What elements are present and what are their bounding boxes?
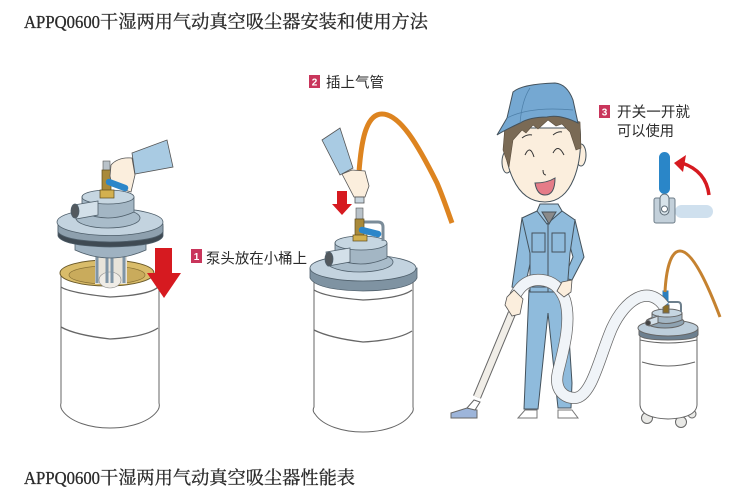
label 3 bbox=[599, 104, 691, 140]
right arm bbox=[564, 220, 584, 280]
label 3: 开关一开就 bbox=[617, 104, 691, 121]
shoes bbox=[518, 410, 578, 418]
lid 2 bbox=[310, 236, 417, 291]
eyes, brows, nose bbox=[522, 132, 564, 175]
mouth bbox=[535, 178, 555, 195]
hand and sleeve 2 bbox=[322, 128, 369, 203]
drum 3 on wheels bbox=[638, 291, 698, 428]
label 3: 可以使用 bbox=[617, 123, 674, 140]
legs bbox=[524, 290, 572, 409]
label 2: 2 bbox=[312, 78, 318, 88]
label 3: 3 bbox=[602, 108, 608, 118]
hair bbox=[503, 112, 581, 167]
pump head lid bbox=[57, 190, 163, 258]
cap bbox=[497, 83, 578, 135]
hand and sleeve bbox=[109, 140, 173, 192]
face bbox=[505, 128, 580, 202]
panel: step 3 switch on and use bbox=[451, 83, 720, 428]
title: installation and usage: APPQ0600 bbox=[24, 12, 100, 32]
panel: step 2 connect air hose bbox=[309, 74, 452, 432]
section title: performance table: APPQ0600 bbox=[24, 468, 100, 488]
red curved arrow bbox=[674, 155, 709, 195]
label 2: 插上气管 bbox=[326, 74, 384, 92]
switch diagram bbox=[654, 152, 713, 223]
white flexible hose bbox=[515, 280, 664, 398]
orange air hose bbox=[359, 114, 452, 223]
title: installation and usage: 干湿两用气动真空吸尘器安装和使用方法 bbox=[100, 12, 429, 32]
valve and lever 2 bbox=[353, 208, 383, 241]
ears bbox=[502, 151, 512, 173]
vacuum wand and nozzle bbox=[451, 313, 512, 418]
worker bbox=[497, 83, 586, 418]
section title: performance table: 干湿两用气动真空吸尘器性能表 bbox=[100, 468, 355, 488]
label 1: 泵头放在小桶上 bbox=[206, 250, 307, 268]
red arrow down small bbox=[332, 191, 352, 215]
pump head rods bbox=[95, 256, 127, 288]
orange air hose 3 bbox=[665, 251, 720, 317]
valve and lever bbox=[100, 161, 114, 198]
drum 1 bbox=[60, 260, 159, 428]
drum 2 bbox=[313, 280, 413, 432]
red arrow down bbox=[147, 248, 181, 298]
panel: step 1 place pump head on drum bbox=[57, 140, 307, 428]
label 1: 1 bbox=[194, 252, 200, 263]
torso bbox=[522, 211, 575, 292]
worker hands bbox=[505, 280, 572, 316]
left arm bbox=[512, 218, 532, 291]
